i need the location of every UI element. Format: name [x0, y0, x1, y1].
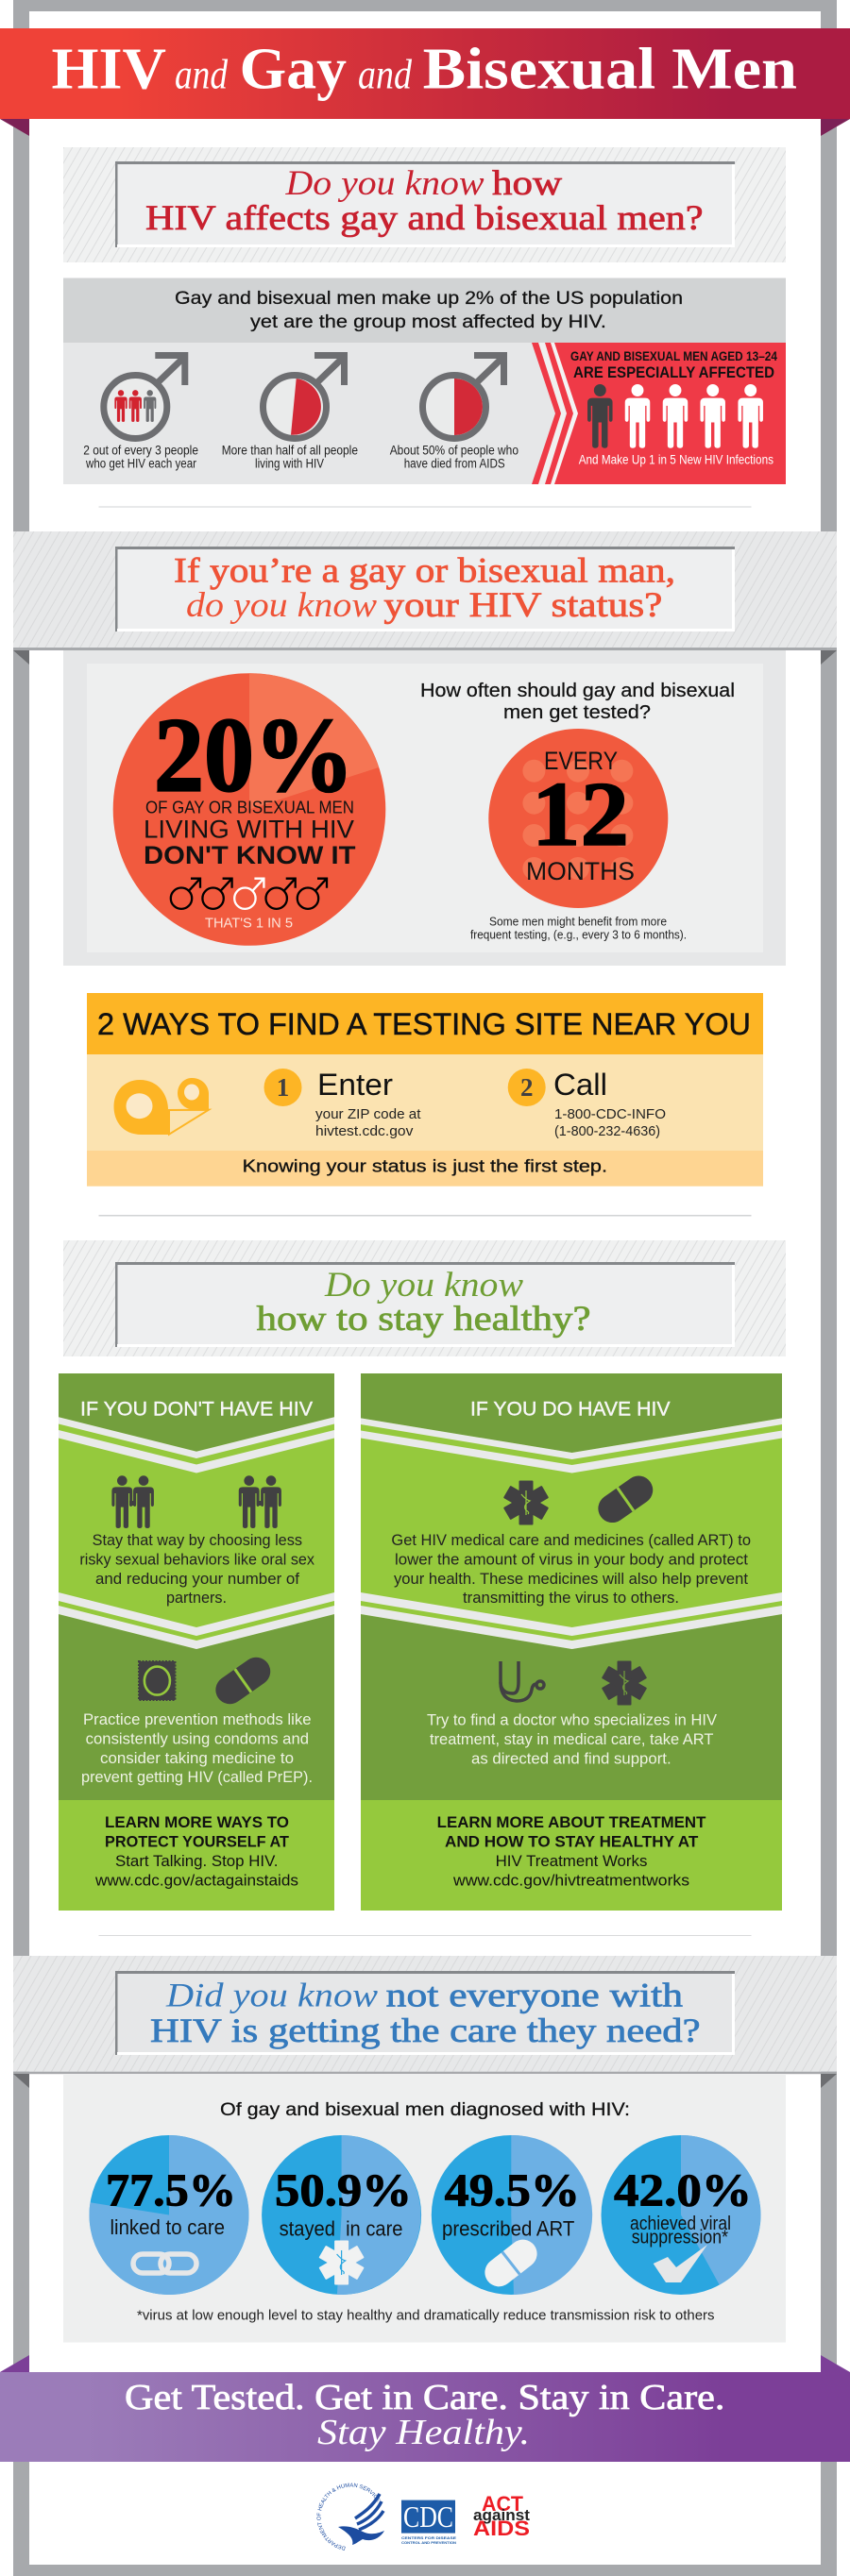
closing banner: [0, 2355, 850, 2462]
title banner: HIV: [51, 38, 166, 102]
callout: men aged 13-24: [532, 343, 786, 484]
chart: every 12 months circle: [488, 729, 668, 908]
chart: 49.5% prescribed ART: [432, 2135, 592, 2295]
heading: how HIV affects gay and bisexual men: HIV affects gay and bisexual men?: [145, 199, 703, 238]
stat: more than half: living with HIV: [255, 457, 324, 471]
logo: CDC: CENTERS FOR DISEASE: [401, 2535, 456, 2540]
icon: pill: [479, 2234, 543, 2292]
chart: 20 percent circle: OF GAY OR BISEXUAL MEN: [145, 798, 354, 817]
heading: getting the care they need: Did you know: [165, 1977, 378, 2014]
chart: 49.5% prescribed ART: prescribed ART: [442, 2217, 574, 2241]
chart: 42.0% achieved viral suppression: 42.0%: [614, 2164, 752, 2216]
text: prevention methods: [81, 1711, 313, 1786]
text: medical care and ART: transmitting the virus to others.: [463, 1590, 679, 1607]
panel: if you don't have HIV: IF YOU DON'T HAVE HIV: [80, 1398, 313, 1420]
panel: population statistics: [63, 278, 786, 484]
text: stay that way: and reducing your number of: [95, 1571, 299, 1588]
testing note: frequent testing, (e.g., every 3 to 6 months).: [470, 928, 687, 942]
heading: how to stay healthy: how to stay healthy?: [257, 1300, 591, 1339]
panel: care continuum: Of gay and bisexual men diagnosed with HIV:: [220, 2100, 630, 2120]
heading: how HIV affects gay and bisexual men: how: [492, 164, 562, 203]
question: how often to test: How often should gay and bisexual: [420, 681, 735, 701]
text: prevention methods: consistently using condoms and: [86, 1731, 309, 1748]
heading: getting the care they need: not everyone with: [386, 1977, 683, 2014]
icon: pill: [592, 1471, 658, 1528]
chart: 77.5% linked to care: [89, 2135, 248, 2295]
chart: 77.5% linked to care: 77.5%: [106, 2164, 236, 2216]
chart: every 12 months circle: 12: [532, 764, 629, 866]
panel: 2 ways to find a testing site: 2 WAYS TO FIND A TESTING SITE NEAR YOU: [97, 1007, 751, 1041]
chart: every 12 months circle: MONTHS: [526, 857, 635, 885]
title banner: and: [175, 51, 229, 98]
text: medical care and ART: Get HIV medical care and medicines (called ART) to: [391, 1532, 751, 1549]
logo: Act Against AIDS: ACT: [482, 2492, 524, 2516]
text: stay that way: partners.: [166, 1590, 227, 1607]
chart: 42.0% achieved viral suppression: achieved viral: [630, 2214, 731, 2234]
footnote: *virus at low enough level to stay healthy and dramatically reduce transmission risk to others: [137, 2308, 714, 2323]
question: how often to test: [420, 681, 735, 723]
heading: getting the care they need: [13, 1956, 837, 2088]
heading: how to stay healthy: Do you know: [324, 1266, 523, 1305]
stat: about 50 percent: About 50% of people who: [390, 444, 518, 458]
heading: getting the care they need: HIV is getting the care they need?: [150, 2012, 701, 2049]
title banner: Bisexual Men: [423, 38, 797, 102]
population statement: Gay and bisexual men make up 2% of the US population: [175, 288, 683, 309]
panel: if you don't have HIV: [59, 1373, 334, 1911]
chart: 20 percent circle: 20%: [154, 697, 354, 814]
heading: how to stay healthy: [63, 1240, 786, 1356]
text: find a doctor: Try to find a doctor who specializes in HIV: [427, 1712, 717, 1729]
icon: map pins: [113, 1078, 209, 1135]
population statement: [63, 278, 786, 343]
logo: CDC: CDC: [403, 2500, 453, 2534]
testing note: [470, 915, 687, 942]
logo: Act Against AIDS: AIDS: [473, 2517, 530, 2540]
logo: CDC: [401, 2500, 456, 2545]
chart: 20 percent circle: [113, 673, 385, 946]
option 1: enter ZIP: 1: [277, 1073, 289, 1102]
callout: men aged 13-24: And Make Up 1 in 5 New HIV Infections: [579, 453, 774, 467]
icon: condom: [139, 1661, 176, 1700]
heading: how HIV affects gay and bisexual men: Do you know: [284, 164, 484, 203]
option 2: call: [508, 1068, 666, 1139]
panel: testing status: [63, 650, 786, 966]
panel: if you do have HIV: IF YOU DO HAVE HIV: [470, 1398, 671, 1420]
text: learn more ways: LEARN MORE WAYS TO: [105, 1814, 289, 1831]
logo: Act Against AIDS: [473, 2492, 530, 2540]
text: learn more ways: www.cdc.gov/actagainstaids: [94, 1873, 298, 1890]
text: medical care and ART: your health. These medicines will also help prevent: [394, 1571, 748, 1588]
text: stay that way: risky sexual behaviors like oral sex: [79, 1552, 315, 1569]
text: prevention methods: consider taking medicine to: [100, 1750, 294, 1767]
text: find a doctor: [427, 1712, 717, 1768]
text: stay that way: Stay that way by choosing less: [93, 1532, 302, 1549]
text: learn more about treatment: [437, 1814, 706, 1890]
logo: Act Against AIDS: against: [473, 2506, 530, 2524]
testing note: Some men might benefit from more: [489, 915, 667, 929]
logo: CDC: CONTROL AND PREVENTION: [401, 2540, 456, 2545]
title banner: and: [358, 51, 413, 98]
chart: 20 percent circle: THAT'S 1 IN 5: [205, 916, 293, 932]
question: how often to test: men get tested?: [503, 702, 651, 723]
text: medical care and ART: lower the amount of virus in your body and protect: [395, 1552, 748, 1569]
stat: about 50 percent: [390, 355, 518, 471]
text: learn more ways: Start Talking. Stop HIV.: [115, 1853, 278, 1870]
chart: 49.5% prescribed ART: 49.5%: [445, 2164, 580, 2216]
callout: men aged 13-24: GAY AND BISEXUAL MEN AGED 13–24: [570, 349, 777, 363]
closing banner: Stay Healthy.: [317, 2413, 530, 2452]
text: learn more about treatment: HIV Treatment Works: [496, 1853, 647, 1870]
text: learn more about treatment: www.cdc.gov/hivtreatmentworks: [452, 1873, 689, 1890]
stat: more than half: More than half of all people: [222, 444, 358, 458]
stat: about 50 percent: have died from AIDS: [404, 457, 505, 471]
option 2: call: 1-800-CDC-INFO: [554, 1106, 666, 1122]
chart: 42.0% achieved viral suppression: [601, 2135, 761, 2295]
stat: 2 out of every 3 people: 2 out of every 3 people: [83, 444, 198, 458]
logo: HHS: DEPARTMENT OF HEALTH & HUMAN SERVICES • USA: [317, 2483, 381, 2551]
option 1: enter ZIP: your ZIP code at: [315, 1106, 421, 1122]
text: prevention methods: Practice prevention methods like: [83, 1711, 312, 1728]
panel: care continuum: [63, 2074, 786, 2343]
closing banner: Get Tested. Get in Care. Stay in Care.: [125, 2378, 724, 2417]
chart: 77.5% linked to care: linked to care: [110, 2215, 225, 2239]
icon: star of life: [602, 1661, 647, 1705]
icon: stethoscope: [501, 1661, 544, 1701]
icon: chain link: [133, 2254, 196, 2273]
icon: star of life: [503, 1480, 549, 1525]
text: find a doctor: as directed and find support.: [471, 1751, 672, 1768]
panel: 2 ways to find a testing site: Knowing your status is just the first step.: [243, 1157, 607, 1176]
text: learn more ways: [94, 1814, 298, 1890]
chart: 50.9% stayed in care: [262, 2135, 421, 2295]
callout: men aged 13-24: ARE ESPECIALLY AFFECTED: [573, 363, 774, 381]
heading: do you know your HIV status: If you’re a gay or bisexual man,: [174, 552, 675, 591]
population statement: yet are the group most affected by HIV.: [250, 311, 606, 332]
stat background: [63, 343, 564, 484]
chart: every 12 months circle: EVERY: [544, 747, 618, 775]
text: stay that way: [79, 1532, 315, 1607]
icon: check mark: [654, 2245, 707, 2282]
icon: couples: [111, 1475, 281, 1528]
text: learn more ways: PROTECT YOURSELF AT: [105, 1833, 289, 1850]
option 1: enter ZIP: hivtest.cdc.gov: [315, 1123, 414, 1139]
chart: 20 percent circle: LIVING WITH HIV: [144, 816, 354, 844]
panel: 2 ways to find a testing site: [87, 993, 763, 1187]
icon: pill: [210, 1652, 276, 1709]
text: find a doctor: treatment, stay in medical care, take ART: [430, 1731, 713, 1748]
title banner: [0, 28, 850, 136]
text: learn more about treatment: AND HOW TO STAY HEALTHY AT: [445, 1833, 698, 1850]
chart: 50.9% stayed in care: stayed in care: [280, 2217, 402, 2241]
title banner: Gay: [240, 38, 347, 102]
option 1: enter ZIP: [264, 1068, 421, 1139]
icon: star of life: [318, 2241, 365, 2284]
logo: HHS: [317, 2483, 385, 2551]
chart: 20 percent circle: DON'T KNOW IT: [144, 841, 355, 869]
text: learn more about treatment: LEARN MORE ABOUT TREATMENT: [437, 1814, 706, 1831]
heading: do you know your HIV status: do you know: [186, 586, 377, 625]
stat: more than half: [222, 355, 358, 471]
option 2: call: Call: [553, 1068, 607, 1102]
chart: 42.0% achieved viral suppression: suppression*: [632, 2228, 728, 2248]
chart: 50.9% stayed in care: 50.9%: [275, 2164, 412, 2216]
heading: do you know your HIV status: [13, 531, 837, 665]
heading: how HIV affects gay and bisexual men: [63, 147, 786, 262]
option 2: call: (1-800-232-4636): [554, 1123, 660, 1139]
option 2: call: 2: [520, 1073, 533, 1102]
text: prevention methods: prevent getting HIV (called PrEP).: [81, 1769, 313, 1786]
text: medical care and ART: [391, 1532, 751, 1607]
panel: if you do have HIV: [361, 1373, 782, 1911]
stat: 2 out of every 3 people: [83, 355, 198, 471]
stat: 2 out of every 3 people: who get HIV each year: [85, 457, 196, 471]
heading: do you know your HIV status: your HIV status?: [383, 586, 662, 625]
option 1: enter ZIP: Enter: [317, 1068, 393, 1102]
